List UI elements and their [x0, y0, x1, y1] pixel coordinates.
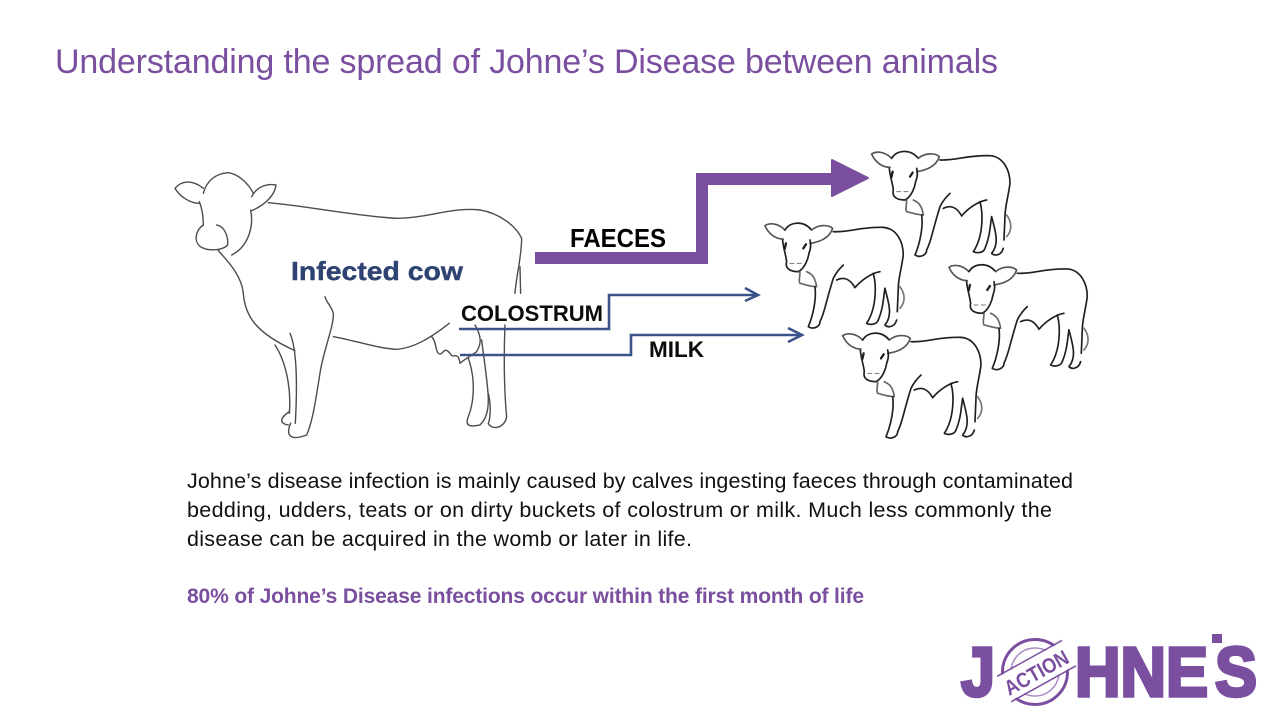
illustration: infected cow — [175, 173, 522, 437]
arrow: faeces route — [535, 160, 868, 258]
illustration: calf, top — [872, 151, 1011, 256]
logo: Johne's Action — [961, 633, 1257, 711]
illustration: calf, bottom — [843, 333, 982, 438]
text block: explanation — [187, 469, 1073, 551]
text block: explanation: disease can be acquired in the womb or later in life. — [187, 527, 692, 551]
logo: Johne's Action: J — [961, 633, 995, 711]
label: faeces: FAECES — [570, 223, 666, 253]
logo: Johne's Action: HNE — [1075, 633, 1208, 711]
logo: Johne's Action: S — [1215, 633, 1257, 711]
label: milk: MILK — [649, 337, 704, 362]
label: colostrum: COLOSTRUM — [461, 301, 603, 326]
text block: explanation: Johne’s disease infection is mainly caused by calves ingesting faeces through contaminated — [187, 469, 1073, 493]
illustration: calf, middle left — [765, 223, 904, 328]
text block: explanation: bedding, udders, teats or on dirty buckets of colostrum or milk. Much less commonly the — [187, 498, 1052, 522]
logo: Johne's Action: ACTION — [1001, 646, 1073, 700]
callout: 80 percent statistic: 80% of Johne’s Disease infections occur within the first month of life — [187, 585, 864, 608]
arrow: colostrum route — [459, 288, 758, 329]
label: infected cow: Infected cow — [291, 256, 464, 286]
arrow: milk route — [460, 328, 802, 355]
illustration: calf, right — [949, 265, 1088, 370]
title: Understanding the spread of Johne’s Disease between animals — [55, 43, 998, 81]
